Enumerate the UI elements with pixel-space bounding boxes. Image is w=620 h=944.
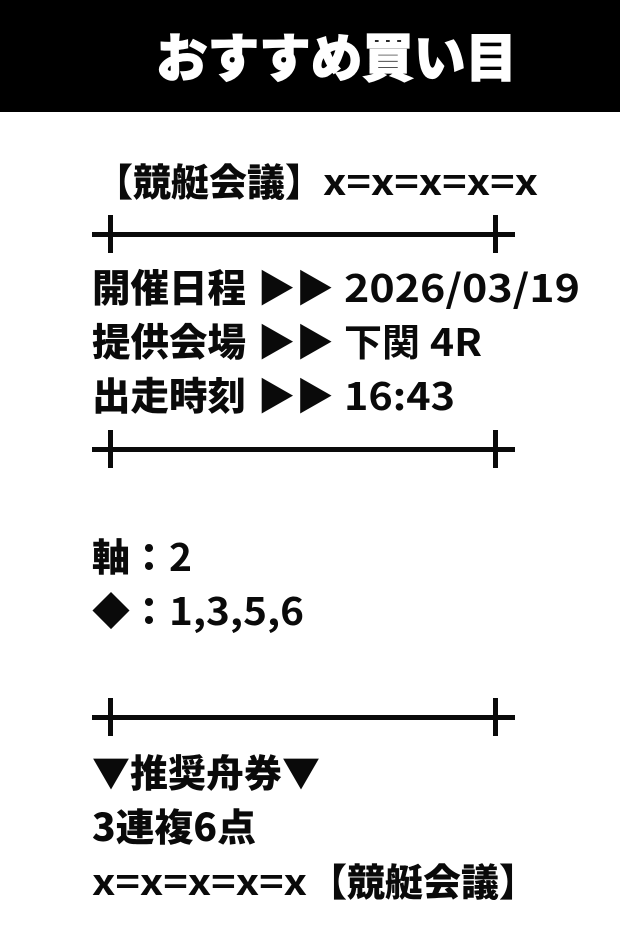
divider bottom bbox=[92, 698, 515, 736]
info row: date: ▶▶ bbox=[257, 258, 334, 313]
other boats: 1,3,5,6 bbox=[169, 581, 304, 636]
footer text: kyotei kaigi: 【競艇会議】 bbox=[309, 852, 537, 907]
info row: start time: ▶▶ bbox=[257, 366, 334, 421]
title: おすすめ買い目 bbox=[156, 17, 517, 92]
recommended ticket heading: ▼推奨舟券▼ bbox=[92, 743, 320, 798]
divider middle bbox=[92, 430, 515, 468]
info row: venue: ▶▶ bbox=[257, 312, 334, 367]
info row: start time bbox=[92, 366, 455, 422]
info row: venue: 4R bbox=[430, 312, 482, 367]
heading: kyotei kaigi top: 【競艇会議】 bbox=[95, 152, 323, 207]
info row: date bbox=[92, 258, 580, 314]
info row: venue: 下関 bbox=[344, 312, 420, 367]
axis boat: 軸： bbox=[92, 527, 168, 582]
heading: kyotei kaigi top bbox=[95, 152, 538, 207]
info row: start time: 出走時刻 bbox=[92, 366, 246, 422]
info row: date: 2026/03/19 bbox=[344, 258, 580, 313]
heading: kyotei kaigi top: x=x=x=x=x bbox=[323, 154, 538, 206]
ticket type: 3連複6点 bbox=[92, 797, 256, 852]
info row: start time: 16:43 bbox=[344, 366, 455, 421]
info row: venue bbox=[92, 312, 482, 368]
other boats bbox=[92, 581, 304, 636]
info row: date: 開催日程 bbox=[92, 258, 246, 314]
footer text: kyotei kaigi: x=x=x=x=x bbox=[92, 854, 307, 906]
axis boat: 2 bbox=[169, 527, 192, 582]
header band bbox=[0, 0, 620, 112]
footer text: kyotei kaigi bbox=[92, 852, 537, 907]
other boats: ◆： bbox=[92, 581, 168, 636]
info row: venue: 提供会場 bbox=[92, 312, 246, 368]
divider top bbox=[92, 215, 515, 253]
